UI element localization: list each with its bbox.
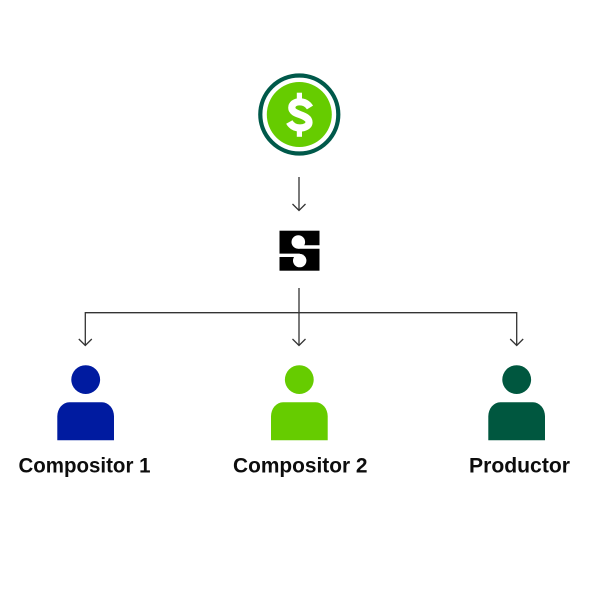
icon: person blue [57,365,114,440]
label: Productor: Productor [469,455,570,478]
icon: person green [271,365,328,440]
icon: publisher logo [280,231,320,271]
label: Compositor 2: Compositor 2 [233,455,368,478]
icon: person dark green [488,365,545,440]
arrows: distribution to three recipients [79,288,523,346]
label: Compositor 1: Compositor 1 [18,455,151,478]
arrow: money to publisher [292,177,306,210]
icon: dollar coin [260,76,338,154]
